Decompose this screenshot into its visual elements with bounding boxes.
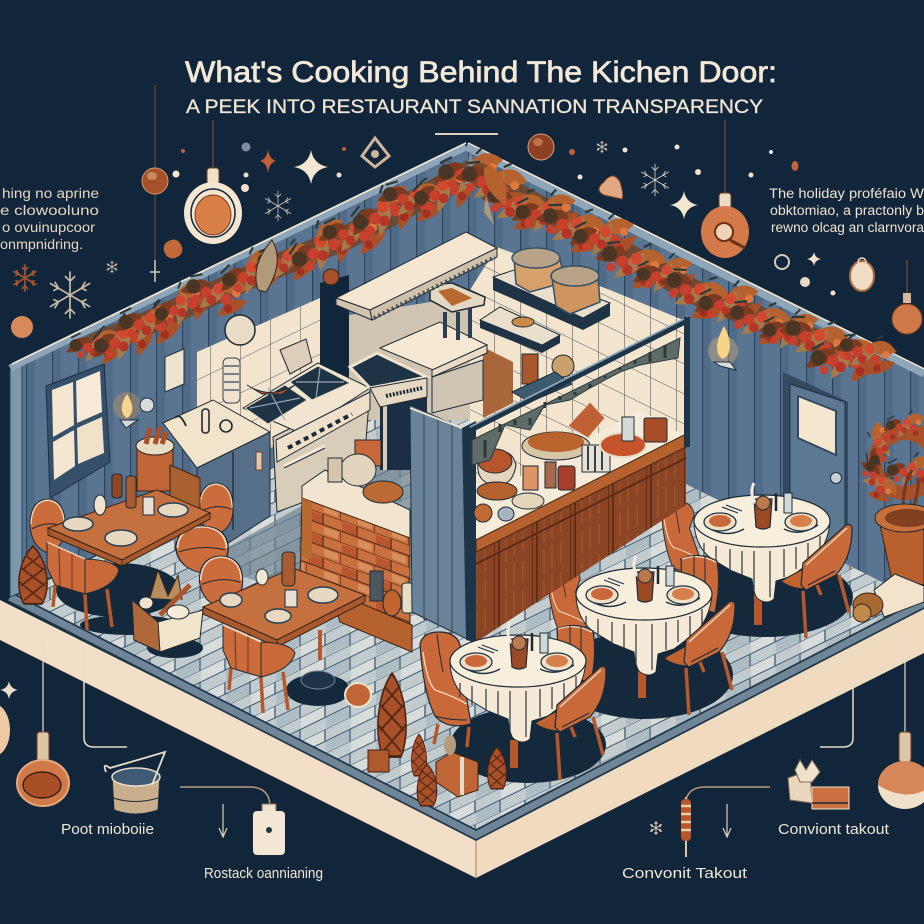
plate stack and pan on stove [223,315,312,403]
round table front with chairs [420,623,606,780]
small flake bottom [650,821,662,835]
small cross left edge [0,681,18,699]
subtitle: A PEEK INTO RESTAURANT SANNATION TRANSPARENCY [186,97,763,118]
fringe hanging from the rail [472,338,680,465]
left line: hanging cord [42,642,44,732]
connector to skewer [686,787,770,800]
ornament: large cream bauble [184,120,242,244]
label: convenient takeout center: Convonit Takout [622,865,748,882]
title: What's Cooking Behind The Kichen Door: [185,56,777,89]
connector to device [180,787,270,804]
wall lamp right [708,326,738,370]
right text block: The holiday proféfaio W [769,186,924,201]
icon: takeout gift boxes [788,760,849,809]
right text block [769,186,924,235]
square table left with chairs and condiments [30,427,233,630]
right text block: obktomiao, a practonly b [770,203,924,218]
round table middle with chairs [547,555,735,715]
garland: left wall [66,148,506,371]
left text block: o ovuinupcoor [2,220,96,235]
shadows beneath dining tables [56,557,853,783]
wall lamp left [113,392,141,428]
partition rail and post [470,317,688,447]
sky decorations: stars, flakes, dots [14,138,798,318]
garland: right wall [450,147,902,382]
label: post cleaning: Poot mioboiie [61,821,154,838]
label: restock: Rostack oannianing [204,865,323,882]
pine tree, cones and gift decor [345,673,506,806]
pine cone by left wall [19,546,47,604]
second range [350,322,487,470]
ornament: small ball right edge [892,260,922,334]
shelves with pots [480,248,610,402]
lower-right bauble [878,732,924,809]
icon: sanitizer device [253,804,285,855]
left text block: onmpnidring. [0,237,83,252]
kitchen tile walls [197,247,688,540]
range hood [336,232,497,340]
ornament: brown ball left [142,85,168,280]
left wall [10,143,466,597]
left L-shaped connector [84,648,127,747]
potted wreath plant [852,411,924,622]
right cord [904,630,906,732]
left edge bauble fragment [0,704,10,756]
left text block [0,186,99,252]
rim of the floor [10,597,924,835]
bar counter with wood panels [476,410,688,642]
basket of supplies [132,570,203,658]
ornament: brown ball center [528,134,554,160]
label: convenient takeout right: Conviont takout [778,821,890,838]
lower-left bauble [17,732,69,806]
hanging towel and tools [140,349,184,412]
left text block: e clowooluno [0,203,99,218]
left text block: hing no aprine [2,186,99,201]
square table center with chairs [199,552,365,713]
stove with burners [243,363,370,512]
plinth: cream isometric base [0,600,924,878]
round table back right with chairs [661,483,852,638]
brick service counter [300,440,416,652]
right wall [466,143,924,603]
window [46,364,110,498]
ornament: orange bauble right [701,120,749,258]
door [783,372,848,560]
sink counter with blue cabinets [163,400,270,558]
partition wall corner [410,405,476,642]
icon: skewer [681,797,691,857]
arrow down right [723,804,731,837]
right L-shaped connector [820,666,853,747]
title divider [435,133,498,135]
food on the bar [474,402,667,522]
ornament: small ball left edge [11,316,33,338]
decorations under right text [775,252,874,296]
kitchen floor shadow [205,440,420,600]
right text block: rewno olcag an clarnvora [771,220,924,235]
icon: pot with handle [105,752,165,814]
floor: stone tiles [12,372,924,834]
arrow down left [219,804,227,837]
